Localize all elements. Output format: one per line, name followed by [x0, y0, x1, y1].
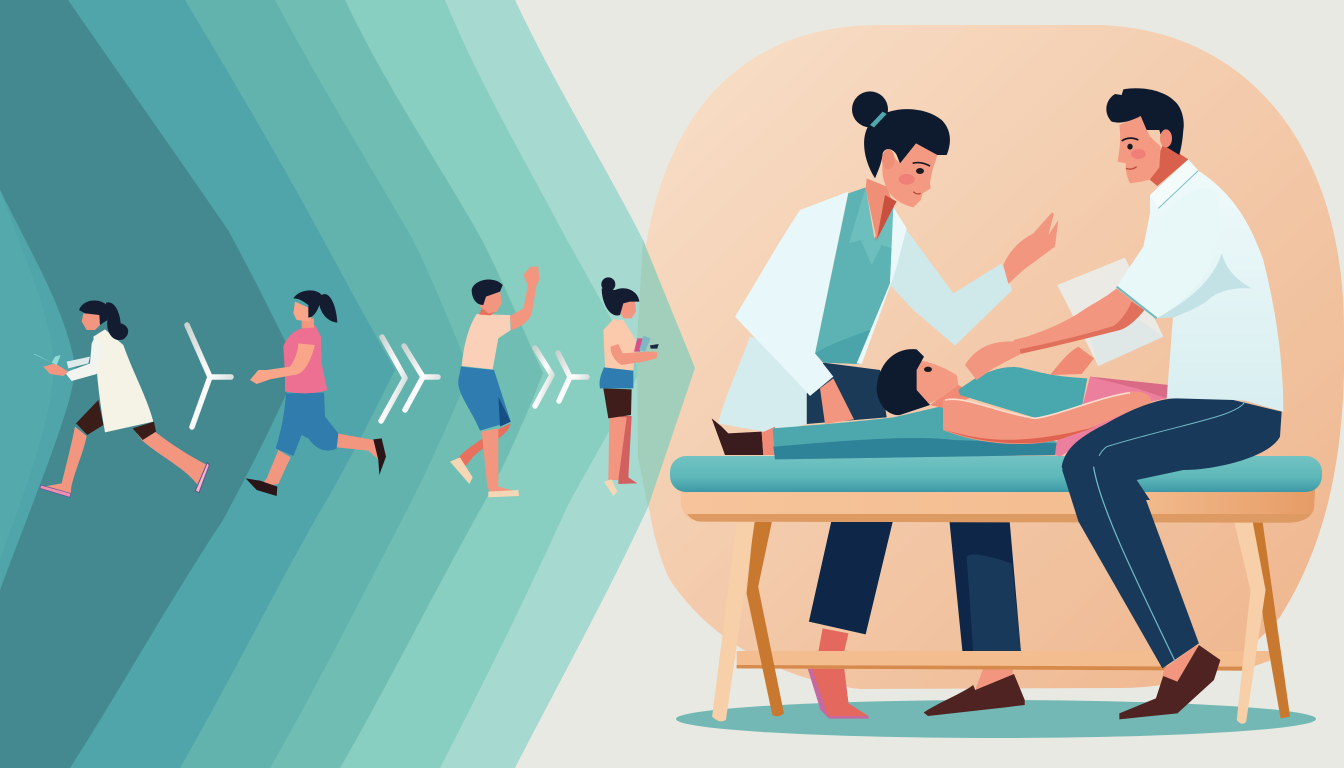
doctor trousers top [807, 363, 887, 424]
ear [882, 149, 895, 169]
therapist hair [1106, 88, 1184, 155]
shoe [1119, 645, 1220, 719]
sleeve edge [1117, 287, 1157, 318]
cheek [899, 174, 915, 185]
raised hand [1003, 213, 1058, 284]
patient eye [924, 367, 932, 372]
table pad [670, 456, 1322, 492]
therapist eye [1127, 144, 1133, 150]
coat far sleeve [890, 207, 1012, 346]
doctor left leg [808, 522, 893, 719]
lower leg [1062, 450, 1199, 668]
left table leg [712, 522, 784, 721]
table rail [681, 490, 1315, 523]
table frame and legs [681, 490, 1315, 724]
chevron 5 [558, 353, 587, 401]
patient lying on table [712, 349, 1062, 459]
therapist torso [1117, 159, 1283, 412]
patient hair [877, 349, 930, 415]
thigh [1062, 398, 1282, 500]
person 1: runner in white coat [33, 300, 209, 497]
hair bun [852, 91, 888, 127]
hair tie [870, 112, 887, 127]
chevron 3 [404, 346, 438, 410]
coat sleeve and chest [735, 192, 848, 396]
panel: peach backdrop [639, 25, 1344, 689]
eye [916, 168, 924, 174]
trouser seam [1095, 402, 1245, 500]
arrow tip overlay [637, 240, 695, 507]
pink garment [1055, 377, 1168, 457]
patient arm [943, 391, 1151, 444]
therapist neck [1149, 143, 1188, 186]
shirt collar [849, 187, 894, 265]
seated therapist [943, 88, 1283, 500]
ankle [1162, 645, 1197, 682]
person 2: runner in pink top [246, 290, 386, 496]
right table leg [1234, 522, 1290, 724]
ground shadow [676, 700, 1316, 738]
doctor right leg [924, 522, 1025, 716]
therapist lower leg and shoe [1062, 450, 1220, 719]
person 3: man waving [450, 267, 539, 497]
therapist cheek [1131, 149, 1146, 159]
patient arm highlight [945, 393, 1130, 418]
group: doctor legs [808, 522, 1025, 719]
hair [864, 109, 950, 178]
therapist mouth [1126, 167, 1137, 169]
front hand [965, 341, 1021, 380]
cross bar [737, 651, 1270, 671]
doctor hand on patient [820, 378, 854, 424]
neck shadow [877, 195, 897, 240]
patient neck [930, 385, 977, 408]
torso shadow [1157, 253, 1252, 318]
therapist ear [1160, 129, 1172, 147]
mouth [913, 192, 921, 194]
second hand [1050, 347, 1094, 375]
face [882, 143, 937, 207]
patient arm shadow [945, 427, 1097, 443]
patient torso [958, 367, 1087, 418]
doctor upper body [718, 91, 1058, 433]
collar edge [1158, 171, 1198, 208]
chevron 4 [535, 348, 552, 406]
person 4: woman with phone [600, 277, 659, 496]
coat body lower [718, 337, 813, 433]
collar [1150, 159, 1198, 208]
group: progress chevrons [187, 325, 587, 427]
shirt [815, 187, 894, 364]
chevron 1 [187, 325, 231, 427]
patient shoe [712, 418, 763, 455]
lower leg seam [1094, 467, 1175, 662]
paper [1057, 258, 1163, 366]
panel: teal chevron bands [0, 0, 695, 768]
front arm [1013, 288, 1144, 354]
eyebrow [913, 163, 930, 166]
chevron 2 [381, 337, 405, 421]
neck [866, 178, 894, 240]
arm shadow [1019, 302, 1144, 354]
patient face [907, 360, 958, 405]
patient legs [773, 407, 1062, 459]
therapist eyebrow [1122, 138, 1138, 141]
shirt sleeve [1117, 189, 1220, 318]
coat front lapel [857, 207, 907, 364]
therapist face [1118, 116, 1161, 183]
